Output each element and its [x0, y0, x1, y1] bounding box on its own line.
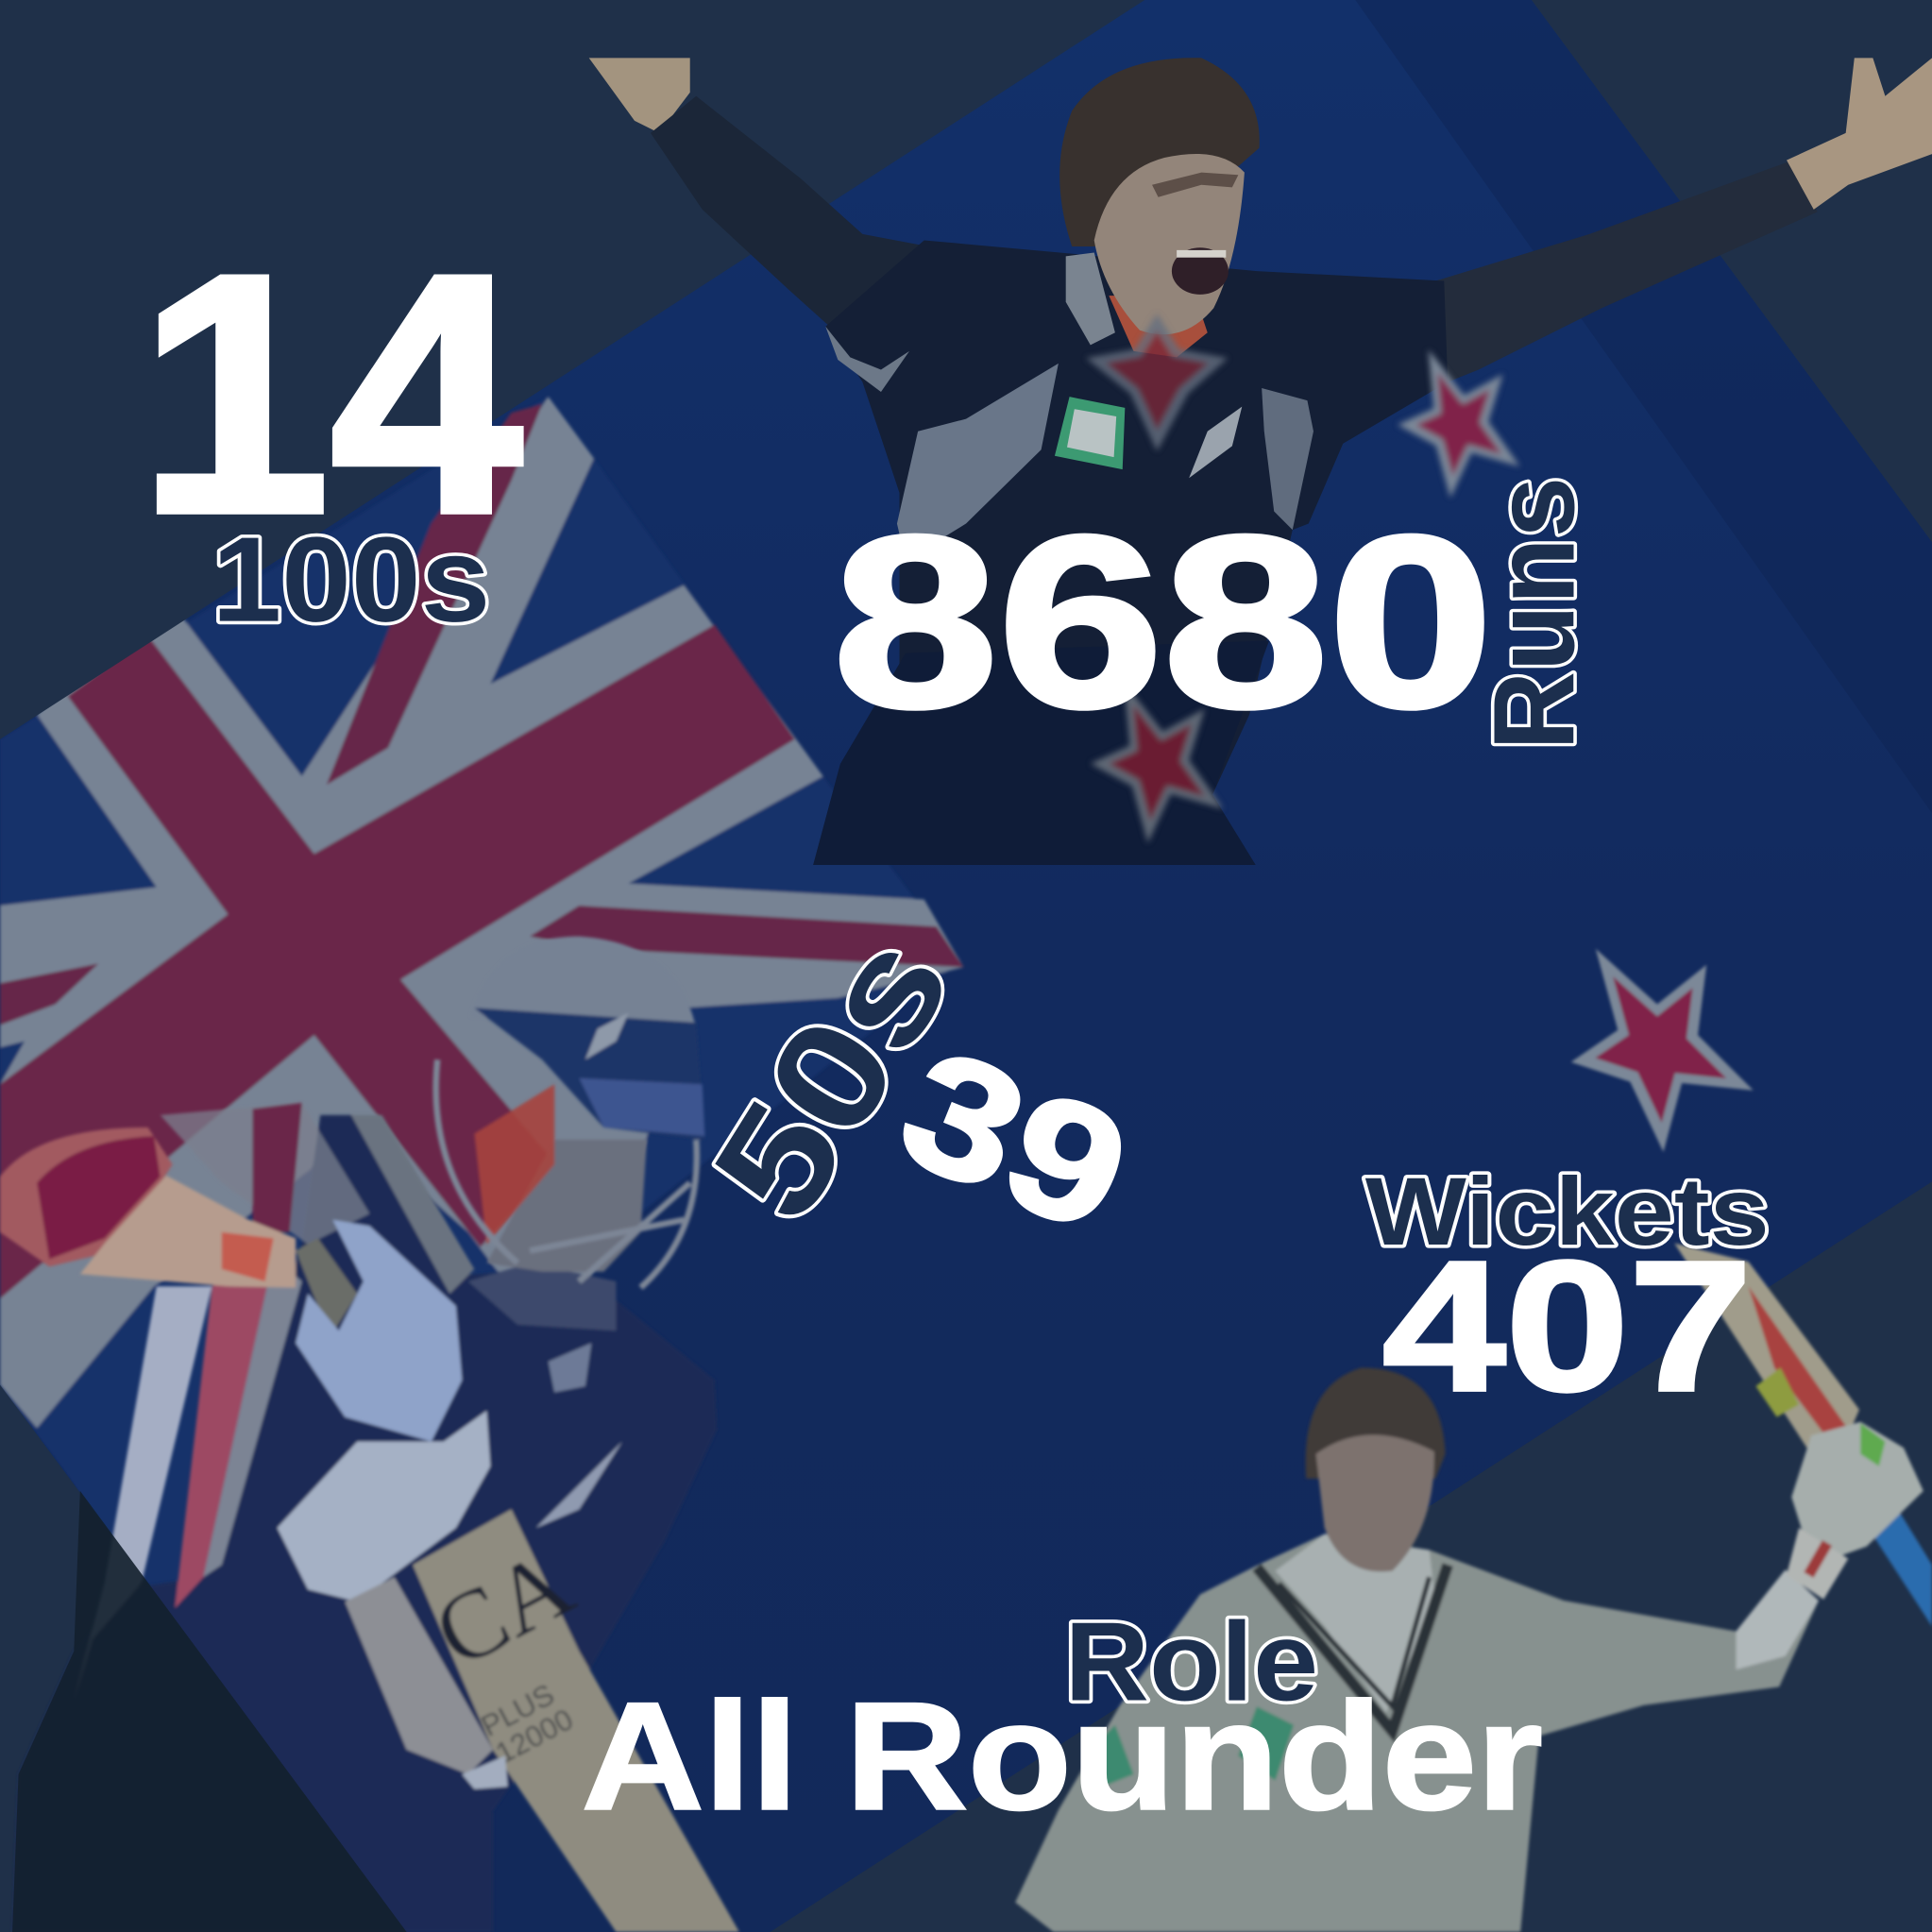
white arm sleeve — [1737, 1569, 1819, 1669]
player: bowler — [589, 58, 1932, 865]
star: lower — [1078, 679, 1242, 855]
number 39: 39 — [877, 1011, 1153, 1269]
sweater — [1015, 1534, 1819, 1932]
panel: union jack flag — [0, 397, 963, 1626]
helmet navy — [474, 1008, 704, 1140]
label Runs: Runs — [1469, 477, 1598, 751]
v-neck stripes — [1257, 1565, 1448, 1731]
forearm lower — [345, 1577, 493, 1774]
bat — [413, 1509, 739, 1932]
left hand — [589, 58, 690, 133]
star: centre top — [1086, 314, 1228, 451]
face — [1316, 1434, 1434, 1571]
panel: dark corner top left — [0, 0, 1144, 739]
left arm sleeve — [651, 96, 961, 357]
white cuff — [462, 1755, 508, 1789]
shirt flash — [536, 1442, 622, 1528]
label Wickets: Wickets — [1365, 1158, 1770, 1265]
badge — [1238, 1706, 1294, 1781]
collar — [1066, 252, 1115, 345]
fern — [1189, 407, 1242, 478]
stat: role — [582, 1601, 1543, 1842]
right hand — [1787, 58, 1932, 210]
panel: dark corner top right — [1532, 0, 1932, 542]
hair — [1059, 58, 1260, 246]
helmet dome — [470, 937, 696, 1029]
right arm sleeve — [1435, 161, 1818, 384]
grey panel left — [897, 364, 1059, 561]
label 50s: 50s — [681, 906, 983, 1248]
number 14: 14 — [138, 205, 525, 585]
glove — [1791, 1422, 1924, 1557]
bat handle — [296, 1238, 357, 1337]
lower glove — [278, 1411, 490, 1602]
faint diagonal band — [1355, 0, 1932, 813]
shirt fern — [549, 1343, 591, 1392]
sleeve stripes — [74, 1286, 212, 1701]
helmet brim — [579, 1078, 704, 1136]
bat blade — [1674, 1244, 1859, 1452]
collar — [1276, 1534, 1435, 1713]
upper glove — [296, 1220, 462, 1442]
glove green — [1860, 1423, 1885, 1466]
number 407: 407 — [1382, 1224, 1752, 1430]
badge — [1055, 397, 1125, 469]
batter shade in dark corner — [12, 1491, 407, 1932]
bat handle — [1848, 1479, 1932, 1626]
wrist band — [1787, 1528, 1848, 1600]
neck collar — [468, 1263, 616, 1330]
bat logo: CA — [417, 1528, 589, 1688]
stars over jersey — [1078, 314, 1537, 855]
forearm skin — [80, 1176, 296, 1288]
label Role: Role — [1064, 1601, 1318, 1725]
neck — [1109, 296, 1208, 357]
helmet grille — [436, 1059, 697, 1288]
face — [1094, 154, 1245, 334]
stat: 14 hundreds — [138, 205, 525, 648]
star: right — [1386, 347, 1537, 509]
grey panel right — [1262, 388, 1313, 530]
player: batsman right — [1015, 1244, 1932, 1932]
player: batter left — [0, 937, 739, 1932]
value All Rounder: All Rounder — [582, 1672, 1543, 1842]
body — [12, 1115, 717, 1932]
label 100s: 100s — [212, 513, 490, 648]
sleeve shoulder — [161, 1103, 369, 1245]
elbow band — [0, 1127, 173, 1266]
mouth — [1172, 247, 1229, 295]
sleeve trim — [825, 327, 909, 392]
helmet fern — [585, 1013, 628, 1059]
stat: 39 fifties — [681, 906, 1153, 1269]
brows — [1152, 173, 1238, 197]
star: large right — [1571, 949, 1754, 1152]
face — [486, 1140, 647, 1272]
shoulder grey band — [351, 1115, 474, 1294]
number 8680: 8680 — [833, 485, 1493, 758]
panel: dark corner bottom left — [0, 1385, 407, 1932]
stat: 8680 runs — [833, 477, 1598, 758]
panel: dark corner bottom right — [771, 1181, 1932, 1932]
torso jersey — [813, 240, 1448, 865]
bat model text: PLUS — [476, 1678, 560, 1743]
hair — [1306, 1367, 1446, 1479]
bat model text: 12000 — [490, 1703, 579, 1771]
stat: 407 wickets — [1365, 1158, 1770, 1430]
